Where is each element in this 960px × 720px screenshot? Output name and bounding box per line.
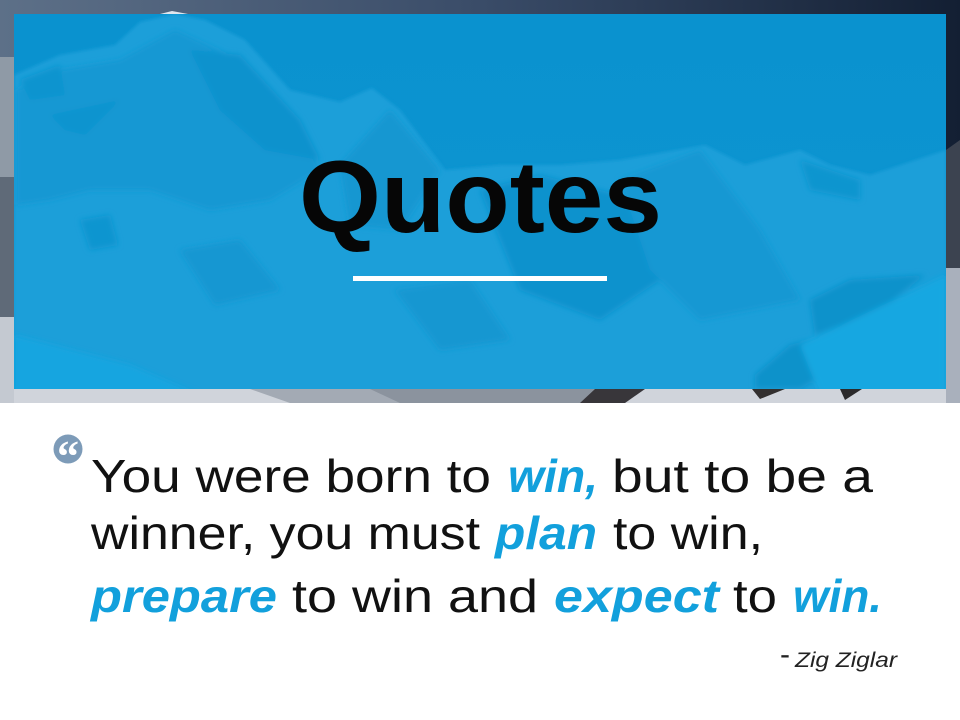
attribution: -	[780, 638, 790, 671]
attribution: Zig Ziglar	[794, 649, 898, 672]
quote text: win,	[508, 450, 598, 502]
quote text: You were born to	[91, 450, 491, 502]
quote text: to	[733, 570, 777, 622]
quote text: win.	[793, 570, 882, 622]
title underline	[353, 276, 607, 281]
mountain texture inside panel	[14, 14, 946, 400]
quote text: winner, you must	[90, 507, 480, 559]
blue title panel	[14, 14, 946, 400]
quote text	[89, 450, 882, 622]
icon: quotation mark badge: “	[57, 432, 79, 481]
quote text: expect	[554, 570, 721, 622]
quote text: plan	[493, 507, 597, 559]
quote text: to win,	[613, 507, 763, 559]
title: Quotes	[299, 140, 662, 254]
quote text: to win and	[292, 570, 538, 622]
quote text: but to be a	[612, 450, 873, 502]
quote text: prepare	[89, 570, 277, 622]
attribution	[780, 638, 898, 672]
background photo: snowy mountains	[0, 0, 960, 403]
